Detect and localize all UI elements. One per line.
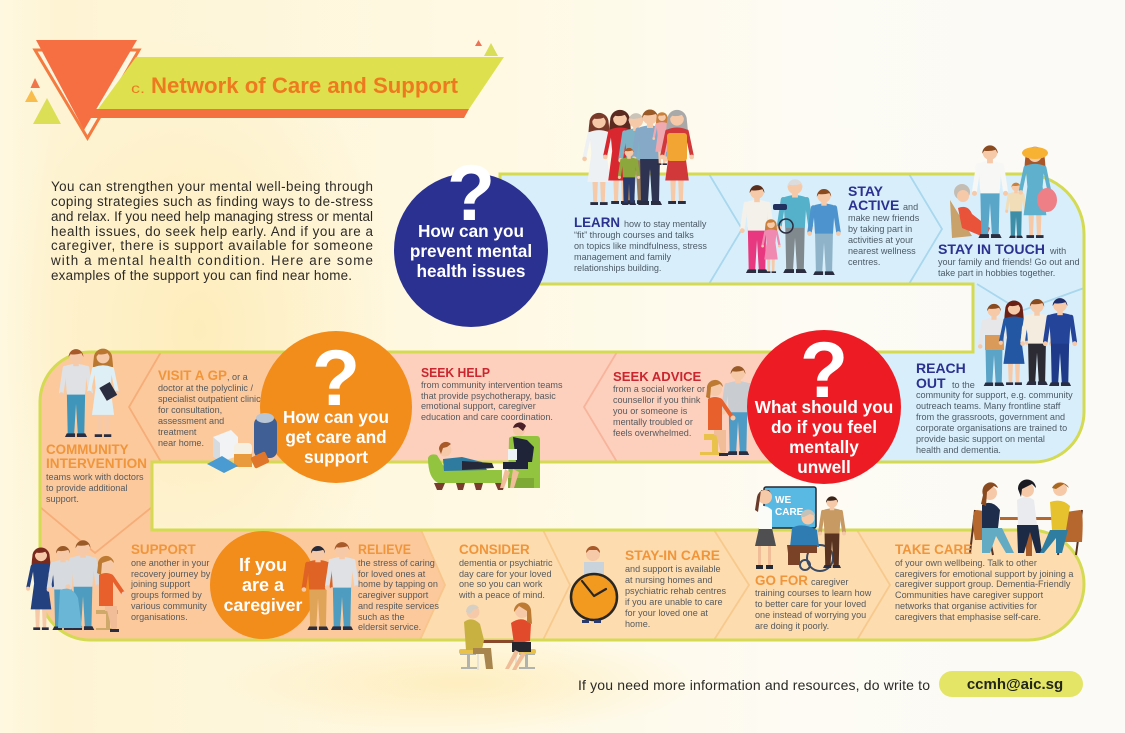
text: seek help: that provide psychotherapy, basic <box>421 391 556 401</box>
text: stay-in care: if you are unable to care <box>625 597 723 607</box>
text: relieve: home by tapping on <box>358 579 438 589</box>
text: stay-in care: psychiatric rehab centres <box>625 586 727 596</box>
text: visit a gp: near home. <box>158 438 204 448</box>
text: stay active: and <box>903 202 918 212</box>
text: visit a gp: for consultation, <box>158 405 222 415</box>
red circle: feel unwell: do if you feel <box>771 417 877 437</box>
text: learn <box>574 214 707 273</box>
text: support: groups formed by <box>131 590 202 600</box>
text: stay in touch: with <box>1049 246 1066 256</box>
illustration: counselling pair <box>700 366 755 456</box>
text: go for: training courses to learn how <box>755 588 872 598</box>
text: community intervention: INTERVENTION <box>46 456 147 471</box>
blue circle: prevent: ? <box>447 148 495 237</box>
illustration: frontline staff <box>978 298 1077 386</box>
text: consider <box>458 542 553 600</box>
text: learn: relationships building. <box>574 263 661 273</box>
text: stay in touch <box>938 241 1080 278</box>
text: visit a gp: treatment <box>158 427 197 437</box>
blue circle: prevent: health issues <box>417 261 525 281</box>
text: support: recovery journey by <box>131 569 211 579</box>
illustration: therapy couch <box>428 422 540 490</box>
pathway track <box>30 160 1100 645</box>
text: stay in touch: your family and friends! Go out and <box>938 257 1080 267</box>
text: stay active: ACTIVE <box>848 197 899 213</box>
email pill <box>939 671 1083 697</box>
text: community intervention: to provide additional <box>46 483 127 493</box>
text: support: organisations. <box>131 612 188 622</box>
orange circle: get care: support <box>304 447 368 467</box>
text: stay-in care: and support is available <box>625 564 721 574</box>
text: seek advice: mentally troubled or <box>613 417 693 427</box>
illustration: caregivers at table <box>970 479 1083 556</box>
text: seek advice: SEEK ADVICE <box>613 369 702 384</box>
text: learn: management and family <box>574 252 672 262</box>
text: stay active: nearest wellness <box>848 246 916 256</box>
text: relieve: caregiver support <box>358 590 429 600</box>
orange circle: get care: How can you <box>283 407 389 427</box>
text: stay in touch: STAY IN TOUCH <box>938 241 1045 257</box>
text: relieve: such as the <box>358 612 405 622</box>
text: go for: GO FOR <box>755 573 808 588</box>
orange circle: get care <box>260 331 412 483</box>
text: seek advice: counsellor if you think <box>613 395 701 405</box>
text: stay active: STAY <box>848 183 884 199</box>
intro paragraph: coping strategies such as finding ways to de-stress <box>51 194 373 209</box>
text: go for <box>755 573 872 631</box>
orange circle: caregiver: If you <box>239 555 287 575</box>
text: visit a gp <box>158 368 261 448</box>
text: consider: one so you can work <box>459 579 543 589</box>
illustration: family at leisure <box>950 145 1057 238</box>
red circle: feel unwell: mentally <box>789 437 859 457</box>
screen with text: WE <box>775 495 791 506</box>
text: go for: to better care for your loved <box>755 599 866 609</box>
text: seek help: SEEK HELP <box>421 365 490 380</box>
blue circle: prevent: prevent mental <box>410 241 532 261</box>
illustration: active people <box>740 179 841 275</box>
text: visit a gp: , or a <box>227 372 249 382</box>
title banner: Network of Care and Support <box>151 73 459 98</box>
text: go for: are doing it poorly. <box>755 621 829 631</box>
illustration: clock with person <box>571 546 617 623</box>
text: seek advice: you or someone is <box>613 406 688 416</box>
text: community intervention: COMMUNITY <box>46 442 129 457</box>
title text: c. <box>131 80 145 96</box>
intro paragraph <box>50 179 374 283</box>
intro paragraph: health issues, do seek help early. And if you are a <box>51 224 374 239</box>
text: stay active <box>848 183 920 267</box>
orange circle: caregiver: caregiver <box>224 595 302 615</box>
text: visit a gp: assessment and <box>158 416 224 426</box>
blue circle: prevent: How can you <box>418 221 524 241</box>
intro paragraph: caregiver, there is support available for someone <box>51 238 373 253</box>
text: community intervention <box>46 442 147 504</box>
text: visit a gp: doctor at the polyclinic / <box>158 383 254 393</box>
illustration: medicine <box>207 413 277 473</box>
text: seek help: education and care coordination. <box>421 412 553 422</box>
text: stay active: activities at your <box>848 235 913 245</box>
intro paragraph: You can strengthen your mental well-being through <box>51 179 373 194</box>
text: learn: on topics like mindfulness, stress <box>574 241 707 251</box>
text: stay-in care: home. <box>625 619 650 629</box>
text: relieve: the stress of caring <box>358 558 435 568</box>
icon: small decorative triangles <box>25 40 498 124</box>
orange circle: caregiver <box>210 531 316 639</box>
intro paragraph: with a mental health condition. Here are some <box>50 253 373 268</box>
illustration: community doctors <box>59 349 119 437</box>
text: take care: of your own wellbeing. Talk to other <box>895 558 1037 568</box>
text: learn: how to stay mentally <box>624 219 707 229</box>
text: visit a gp: VISIT A GP <box>158 368 227 383</box>
text: support: various community <box>131 601 207 611</box>
text: support: one another in your <box>131 558 209 568</box>
text: take care: caregivers that emphasise self-care. <box>895 612 1041 622</box>
text: stay-in care: for your loved one at <box>625 608 708 618</box>
text: consider: dementia or psychiatric <box>459 558 553 568</box>
text: reach out <box>916 360 1073 455</box>
screen with text <box>764 487 816 528</box>
footer contact line: If you need more information and resources, do write to <box>578 677 930 693</box>
text: learn: LEARN <box>574 214 620 230</box>
text: take care: Communities have caregiver support <box>895 590 1044 600</box>
text: support: joining support <box>130 579 191 589</box>
illustration: support group <box>26 540 127 632</box>
text: reach out: REACH <box>916 360 966 376</box>
text: relieve: and respite services <box>358 601 439 611</box>
text: relieve: eldersit service. <box>358 622 421 632</box>
text: stay-in care: at nursing homes and <box>625 575 712 585</box>
text: reach out: community for support, e.g. community <box>916 390 1073 400</box>
text: take care <box>895 542 1074 622</box>
text: seek advice <box>613 369 705 438</box>
text: support: SUPPORT <box>131 542 197 557</box>
text: stay active: centres. <box>848 257 880 267</box>
text: stay in touch: take part in hobbies together. <box>938 268 1055 278</box>
text: take care: caregivers for emotional support by joining a <box>895 569 1074 579</box>
text: take care: caregiver support group. Dementia-Friendly <box>895 579 1071 589</box>
orange circle: caregiver: are a <box>242 575 285 595</box>
text: take care: TAKE CARE <box>895 542 972 557</box>
text: relieve: for loved ones at <box>358 569 426 579</box>
orange circle: get care: ? <box>312 333 360 422</box>
orange circle: get care: get care and <box>285 427 387 447</box>
title banner <box>25 40 504 138</box>
text: seek advice: from a social worker or <box>613 384 705 394</box>
intro paragraph: examples of the support you can find near home. <box>51 268 352 283</box>
email pill: ccmh@aic.sg <box>967 676 1063 693</box>
text: stay active: by taking part in <box>848 224 912 234</box>
text: seek help: from community intervention teams <box>421 380 563 390</box>
text: consider: CONSIDER <box>459 542 530 557</box>
text: stay active: make new friends <box>848 213 920 223</box>
text: go for: one instead of worrying you <box>755 610 866 620</box>
text: reach out: to the <box>952 380 975 390</box>
text: go for: caregiver <box>811 577 848 587</box>
text: community intervention: teams work with doctors <box>46 472 144 482</box>
footer contact line <box>578 671 1083 697</box>
text: consider: with a peace of mind. <box>458 590 545 600</box>
intro paragraph: and relax. If you need help managing stress or mental <box>51 209 373 224</box>
text: consider: day care for your loved <box>459 569 552 579</box>
text: stay-in care <box>625 548 727 629</box>
text: community intervention: support. <box>46 494 79 504</box>
screen with text: CARE <box>775 507 804 518</box>
blue circle: prevent <box>394 148 548 327</box>
red circle: feel unwell: ? <box>800 325 848 414</box>
text: stay-in care: STAY-IN CARE <box>625 548 720 563</box>
text: seek advice: feels overwhelmed. <box>613 428 691 438</box>
text: take care: networks that organise activities for <box>895 601 1037 611</box>
red circle: feel unwell: What should you <box>755 397 893 417</box>
red circle: feel unwell: unwell <box>797 457 851 477</box>
text: seek help <box>421 365 563 422</box>
text: support <box>130 542 211 622</box>
text: reach out: health and dementia. <box>916 445 1001 455</box>
illustration: caregiver pair <box>302 542 359 630</box>
text: seek help: emotional support, caregiver <box>421 401 536 411</box>
text: reach out: from the grassroots, government and <box>916 412 1065 422</box>
text: relieve: RELIEVE <box>358 542 411 557</box>
illustration: table conversation <box>459 602 536 670</box>
text: reach out: provide basic support on mental <box>916 434 1045 444</box>
text: reach out: OUT <box>916 375 946 391</box>
illustration: caregiver training <box>755 487 846 571</box>
text: reach out: corporate organisations are trained to <box>916 423 1067 433</box>
red circle: feel unwell <box>747 325 901 484</box>
text: visit a gp: specialist outpatient clinic <box>158 394 261 404</box>
text: learn: “fit” through courses and talks <box>574 230 694 240</box>
text: relieve <box>358 542 439 632</box>
illustration: family group <box>582 110 694 205</box>
text: reach out: outreach teams. Many frontline staff <box>916 401 1061 411</box>
